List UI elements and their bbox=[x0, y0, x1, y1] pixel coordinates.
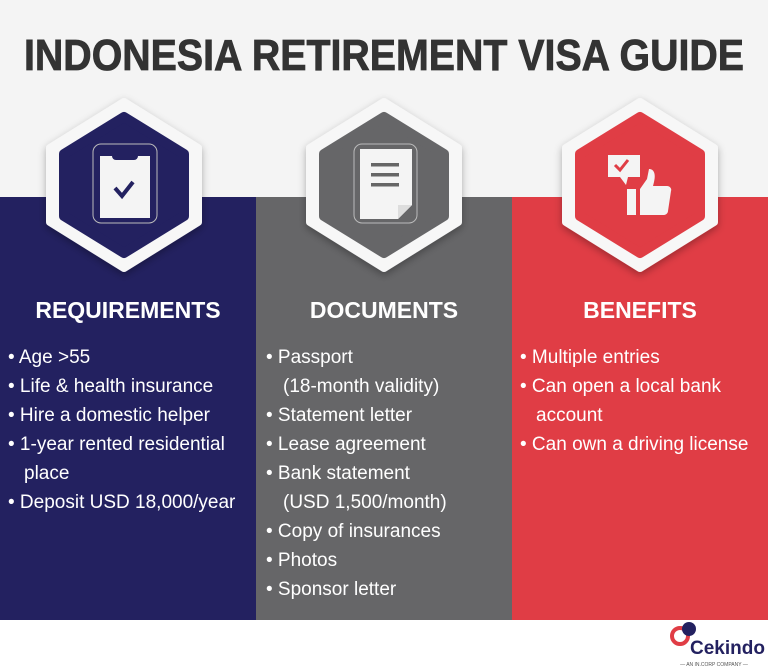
icon: thumbs up with check bubble bbox=[608, 155, 671, 215]
heading: requirements: REQUIREMENTS bbox=[35, 297, 221, 323]
panel: benefits text: • Can open a local bank bbox=[520, 376, 722, 397]
panel: benefits text bbox=[520, 297, 748, 455]
heading: documents: DOCUMENTS bbox=[310, 297, 458, 323]
panel: documents text bbox=[266, 297, 458, 600]
panel: benefits text: • Can own a driving license bbox=[520, 434, 748, 455]
panel: requirements text: • Deposit USD 18,000/year bbox=[8, 492, 236, 513]
logo: Cekindo bbox=[672, 622, 765, 668]
panel: requirements background bbox=[0, 197, 256, 620]
panel: documents text: • Copy of insurances bbox=[266, 521, 441, 542]
panel: documents text: • Statement letter bbox=[266, 405, 413, 426]
panel: requirements text: • Hire a domestic helper bbox=[8, 405, 211, 426]
panel: documents background bbox=[256, 197, 512, 620]
panel: documents text: • Photos bbox=[266, 550, 337, 571]
badge: benefits bbox=[566, 102, 714, 268]
panel: documents text: (18-month validity) bbox=[283, 376, 439, 397]
panel: documents text: • Passport bbox=[266, 347, 354, 368]
panel: requirements text: • Age >55 bbox=[8, 347, 90, 368]
panel: benefits text: • Multiple entries bbox=[520, 347, 660, 368]
logo: Cekindo: Cekindo bbox=[690, 638, 765, 659]
logo: Cekindo: — AN IN.CORP COMPANY — bbox=[680, 662, 748, 668]
panel: benefits text: account bbox=[536, 405, 603, 426]
panel: requirements text: place bbox=[24, 463, 69, 484]
panel: documents text: (USD 1,500/month) bbox=[283, 492, 447, 513]
icon: document bbox=[354, 144, 417, 223]
panel: requirements text bbox=[8, 297, 236, 513]
panel: documents text: • Sponsor letter bbox=[266, 579, 397, 600]
footer strip bbox=[0, 620, 768, 672]
panel: documents text: • Bank statement bbox=[266, 463, 411, 484]
badge: documents bbox=[310, 102, 458, 268]
panel: documents text: • Lease agreement bbox=[266, 434, 427, 455]
badge: requirements bbox=[50, 102, 198, 268]
icon: clipboard check bbox=[93, 144, 157, 223]
heading: benefits: BENEFITS bbox=[583, 297, 697, 323]
panel: requirements text: • 1-year rented residential bbox=[8, 434, 225, 455]
panel: benefits background bbox=[512, 197, 768, 620]
panel: requirements text: • Life & health insurance bbox=[8, 376, 213, 397]
